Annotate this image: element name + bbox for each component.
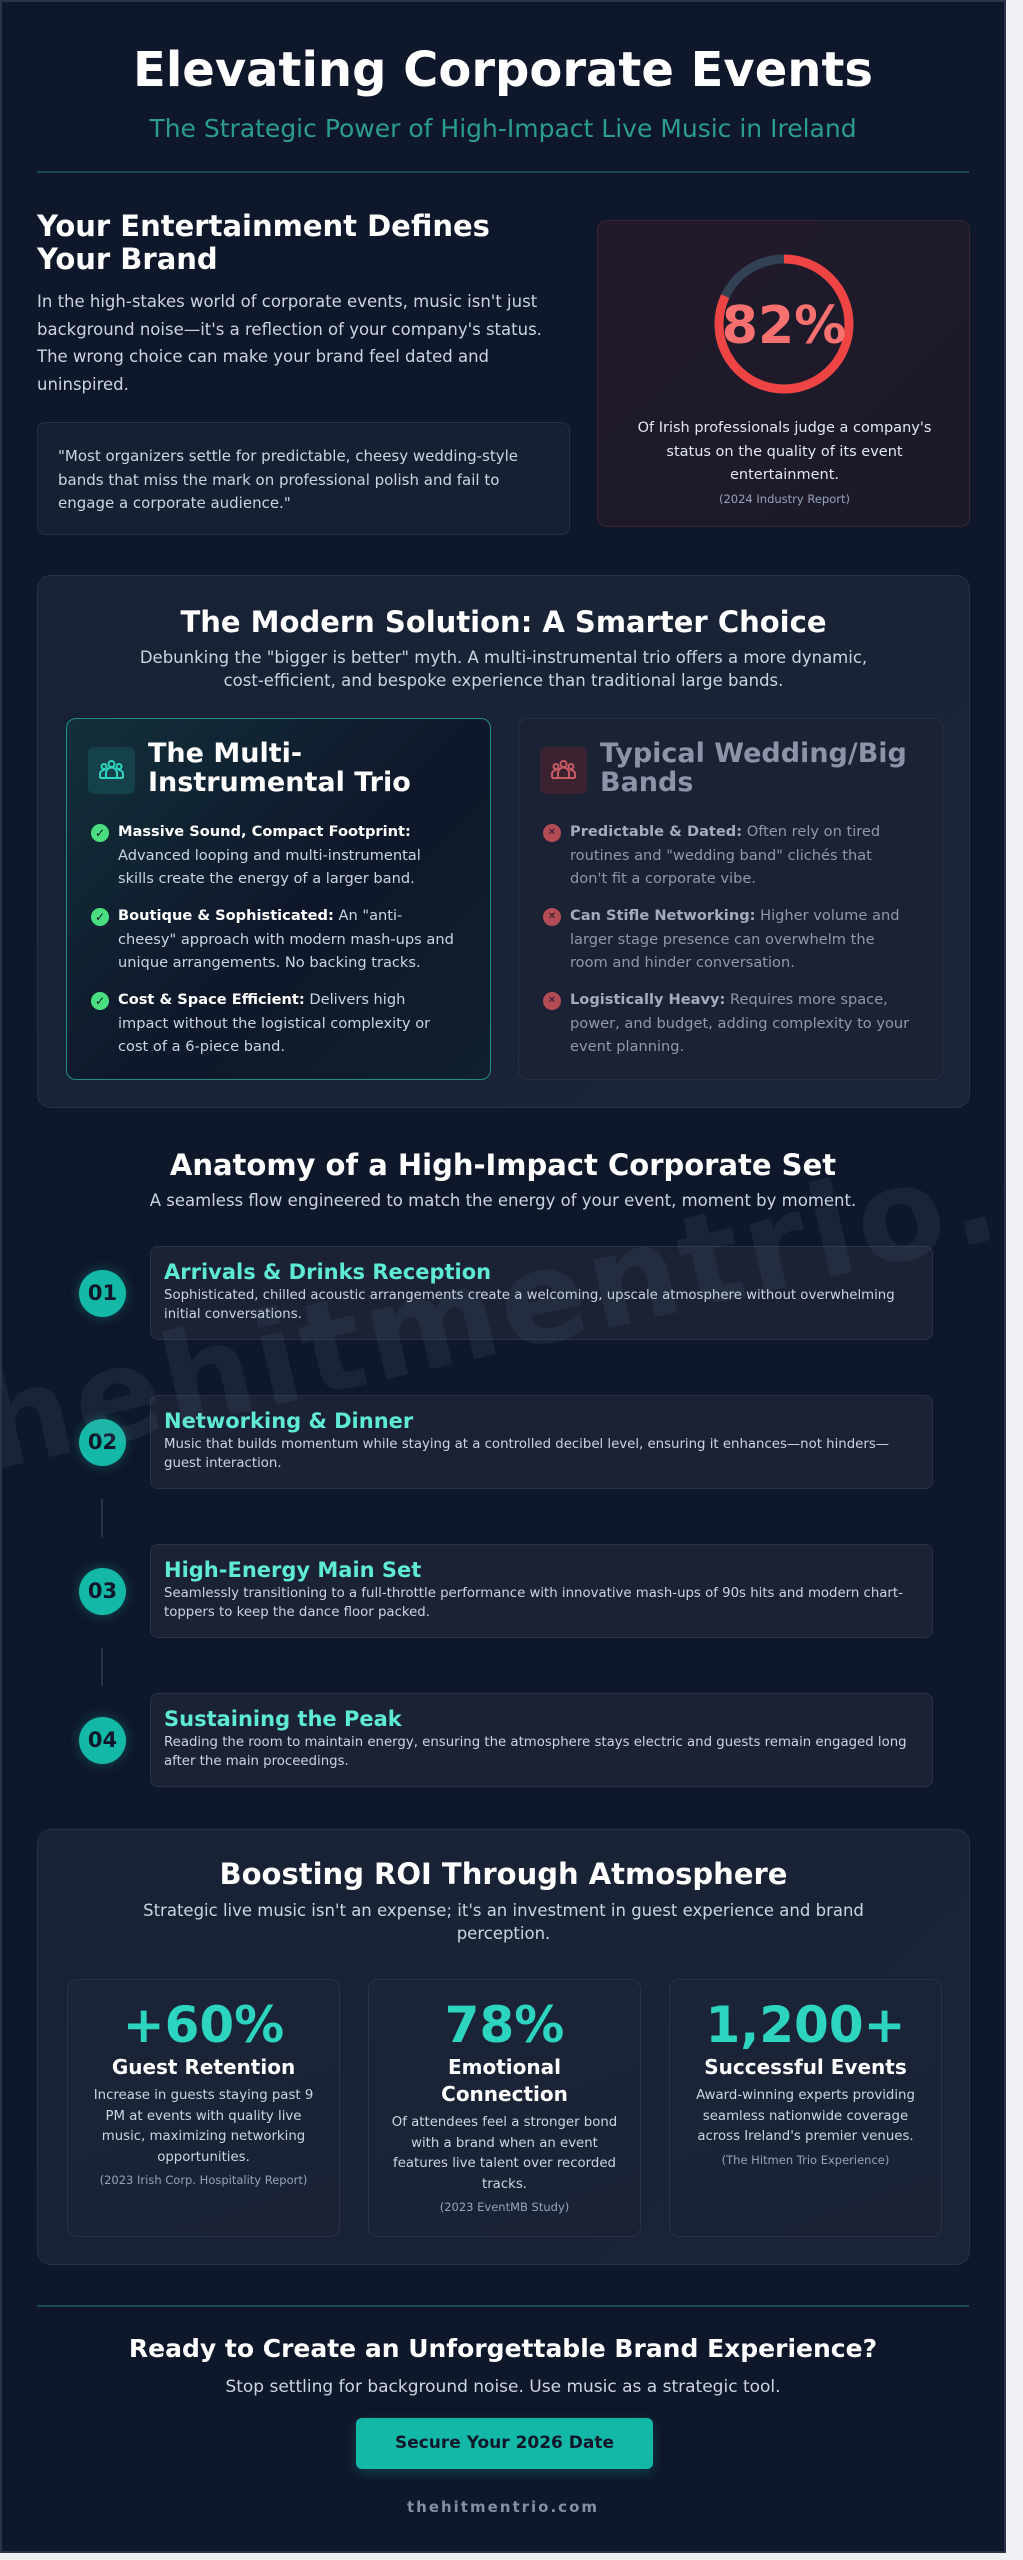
stat: emotional connection (368, 1979, 641, 2237)
intro paragraph: In the high-stakes world of corporate events, music isn't just background noise—it's a reflection of your company's status. The wrong choice can make your brand feel dated and uninspired. (37, 292, 542, 394)
bullet 1: Massive Sound, Compact Footprint: (118, 823, 411, 840)
section heading: The Modern Solution: A Smarter Choice (180, 605, 826, 639)
stat: emotional connection: 78% (445, 1996, 564, 2054)
card: big bands: ✕ (548, 995, 556, 1006)
donut chart: 82% (722, 296, 846, 356)
bullet 1: routines and "wedding band" clichés that (570, 846, 872, 864)
bullet 2: Boutique & Sophisticated: An "anti- (118, 907, 402, 924)
bullet 1 (91, 823, 421, 887)
step card: High-Energy Main Set (164, 1558, 421, 1582)
CTA button (356, 2418, 653, 2469)
step card: Networking & Dinner (164, 1409, 413, 1433)
section heading: anatomy: Anatomy of a High-Impact Corporate Set (170, 1148, 836, 1182)
number 03 (79, 1568, 126, 1615)
stat: retention: Guest Retention (112, 2055, 295, 2079)
bullet 1 (543, 823, 880, 887)
bullet 2: unique arrangements. No backing tracks. (118, 954, 421, 971)
bullet 1: Advanced looping and multi-instrumental (118, 846, 421, 864)
card: big bands: ✕ (548, 911, 556, 922)
bullet 2: larger stage presence can overwhelm the (570, 930, 875, 948)
stat: retention: Increase in guests staying past 9 PM at events with quality live music, maximizing networking opportunities. (94, 2088, 313, 2164)
stat: events: Successful Events (704, 2055, 907, 2079)
donut chart (714, 254, 854, 394)
bullet 1: Predictable & Dated: Often rely on tired (570, 823, 880, 840)
CTA button: Secure Your 2026 Date (395, 2433, 614, 2453)
card: big bands: ✕ (548, 827, 556, 838)
stat: emotional connection: Connection (441, 2082, 568, 2106)
number 02: 02 (88, 1430, 117, 1454)
stat: retention (67, 1979, 340, 2237)
number 01 (79, 1270, 126, 1317)
stat: events: (The Hitmen Trio Experience) (722, 2152, 889, 2166)
intro text block (36, 209, 542, 394)
icon: trio (88, 747, 135, 794)
card heading (600, 738, 907, 798)
card: trio (66, 718, 491, 1080)
bullet 3: power, and budget, adding complexity to your (570, 1014, 909, 1032)
stat: emotional connection: (2023 EventMB Study) (440, 2200, 569, 2214)
intro heading: Your Entertainment Defines Your Brand (37, 209, 490, 276)
step card (150, 1395, 933, 1489)
bullet 2 (543, 907, 899, 971)
number 03: 03 (88, 1579, 117, 1603)
bullet 3: Cost & Space Efficient: Delivers high (118, 991, 405, 1008)
CTA subtext: Stop settling for background noise. Use music as a strategic tool. (225, 2377, 781, 2397)
CTA heading: Ready to Create an Unforgettable Brand Experience? (129, 2334, 877, 2363)
stat: emotional connection: Emotional (448, 2055, 561, 2079)
card: trio: ✓ (95, 826, 105, 840)
footer url: thehitmentrio.com (407, 2498, 599, 2516)
step card: Sophisticated, chilled acoustic arrangements create a welcoming, upscale atmosphere without overwhelming initial conversations. (164, 1288, 895, 1322)
stat: retention: (2023 Irish Corp. Hospitality Report) (100, 2173, 307, 2187)
card heading (148, 738, 411, 798)
quote box (37, 422, 570, 535)
number 02 (79, 1419, 126, 1466)
stat: events (669, 1979, 942, 2237)
bullet 3 (91, 991, 430, 1055)
number 04: 04 (88, 1728, 117, 1752)
bullet 1: don't fit a corporate vibe. (570, 870, 756, 887)
step 1 (74, 1246, 933, 1340)
timeline connectors (101, 1499, 103, 1537)
section subtitle: A seamless flow engineered to match the energy of your event, moment by moment. (150, 1191, 856, 1210)
quote box: "Most organizers settle for predictable, cheesy wedding-style bands that miss the mark on professional polish and fail to engage a corporate audience." (58, 447, 518, 512)
section subtitle: Debunking the "bigger is better" myth. A multi-instrumental trio offers a more dynamic, cost-efficient, and bespoke experience than traditional large bands. (140, 648, 867, 690)
bullet 2: room and hinder conversation. (570, 954, 795, 971)
stat: events: 1,200+ (705, 1996, 906, 2054)
step card (150, 1544, 933, 1638)
card heading: Typical Wedding/Big (600, 738, 907, 769)
bullet 2: cheesy" approach with modern mash-ups and (118, 930, 454, 948)
card heading: Instrumental Trio (148, 767, 411, 798)
card: big bands (518, 718, 943, 1080)
bullet 3 (543, 991, 910, 1055)
number 04 (79, 1717, 126, 1764)
bullet 2: Can Stifle Networking: Higher volume and (570, 907, 899, 924)
benefits list (91, 823, 454, 1055)
number 01: 01 (88, 1281, 117, 1305)
section subtitle: Strategic live music isn't an expense; it's an investment in guest experience and brand perception. (143, 1901, 864, 1943)
step 2 (74, 1395, 933, 1489)
stat card: 82% (597, 220, 970, 527)
step card (150, 1693, 933, 1787)
stat: emotional connection: Of attendees feel a stronger bond with a brand when an event features live talent over recorded tracks. (392, 2115, 617, 2192)
card: trio: ✓ (95, 910, 105, 924)
card heading: The Multi- (148, 738, 302, 769)
card heading: Bands (600, 767, 693, 798)
subtitle: The Strategic Power of High-Impact Live Music in Ireland (149, 114, 857, 143)
step card: Sustaining the Peak (164, 1707, 402, 1731)
panel: modern solution (37, 575, 970, 1108)
stat caption: Of Irish professionals judge a company's status on the quality of its event entertainment. (638, 420, 931, 483)
step card: Reading the room to maintain energy, ensuring the atmosphere stays electric and guests remain engaged long after the main proceedings. (164, 1735, 907, 1769)
step card: Arrivals & Drinks Reception (164, 1260, 491, 1284)
step 3 (74, 1544, 933, 1638)
step card (150, 1246, 933, 1340)
bullet 3: event planning. (570, 1038, 684, 1055)
bullet 3: impact without the logistical complexity or (118, 1014, 430, 1032)
bullet 3: Logistically Heavy: Requires more space, (570, 991, 888, 1008)
stat: events: Award-winning experts providing seamless nationwide coverage across Ireland's premier venues. (696, 2088, 915, 2144)
title: Elevating Corporate Events (133, 42, 873, 98)
stat: retention: +60% (123, 1996, 284, 2054)
step card: Seamlessly transitioning to a full-throttle performance with innovative mash-ups of 90s hits and modern chart-toppers to keep the dance floor packed. (164, 1586, 903, 1620)
bullet 3: cost of a 6-piece band. (118, 1038, 285, 1055)
section heading: Boosting ROI Through Atmosphere (220, 1857, 787, 1891)
step card: Music that builds momentum while staying at a controlled decibel level, ensuring it enhances—not hinders—guest interaction. (164, 1437, 889, 1471)
panel: ROI (37, 1829, 970, 2265)
drawbacks list (543, 823, 910, 1055)
card: trio: ✓ (95, 994, 105, 1008)
bullet 1: skills create the energy of a larger band. (118, 870, 415, 887)
icon: band (540, 747, 587, 794)
stat caption: (2024 Industry Report) (719, 492, 850, 506)
step 4 (74, 1693, 933, 1787)
bullet 2 (91, 907, 454, 971)
